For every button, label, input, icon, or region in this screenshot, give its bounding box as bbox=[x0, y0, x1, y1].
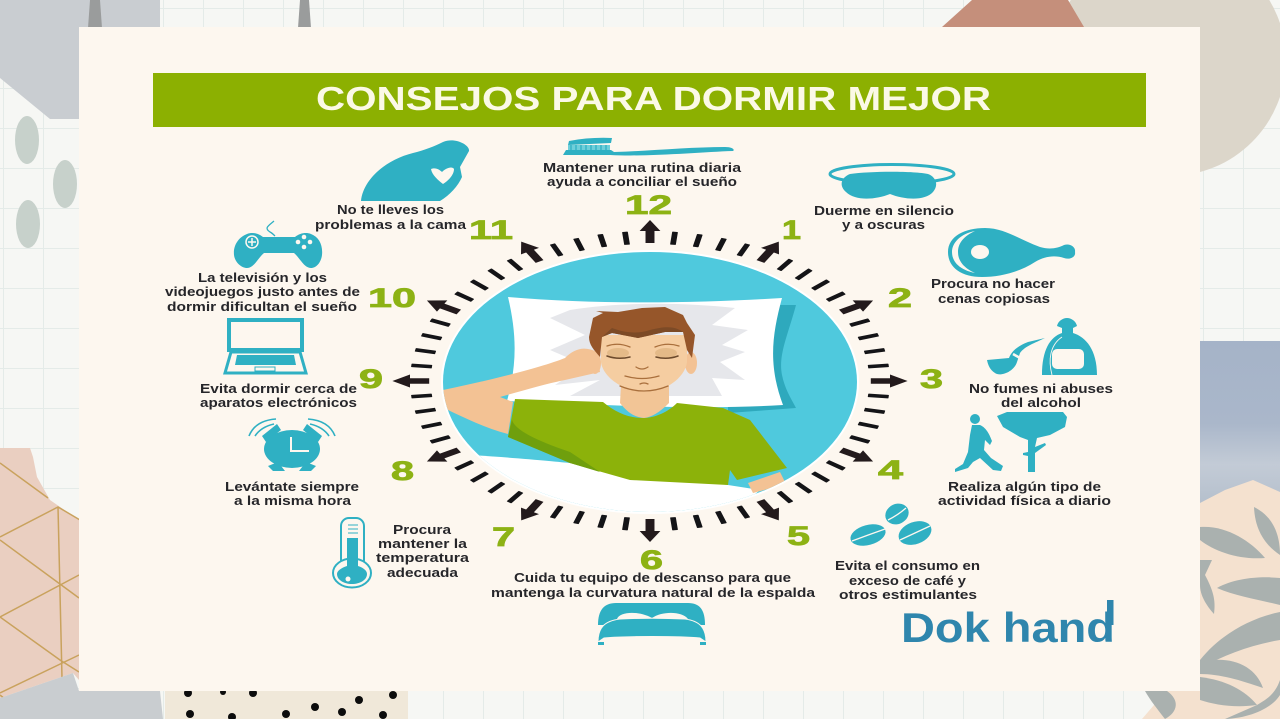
icon: sleep mask bbox=[830, 164, 954, 199]
clock numbers bbox=[359, 190, 943, 575]
clock numbers: 1 bbox=[782, 215, 801, 245]
shirt bbox=[508, 399, 787, 485]
logo: Dok hand: Dok hand bbox=[901, 604, 1115, 651]
clock numbers: 10 bbox=[368, 283, 416, 313]
tip 7: temperature: mantener la bbox=[378, 537, 468, 551]
right forearm bbox=[748, 472, 786, 493]
icon: pipe bbox=[987, 338, 1045, 374]
clock numbers: 9 bbox=[359, 364, 383, 394]
tip 2: light dinner: cenas copiosas bbox=[938, 292, 1050, 306]
clock dial ticks and arrows bbox=[392, 220, 908, 542]
tip 5: coffee: exceso de café y bbox=[849, 574, 966, 588]
tip 7: temperature: adecuada bbox=[387, 566, 459, 580]
icon: laptop bbox=[225, 320, 306, 373]
pillow bbox=[507, 297, 783, 407]
tip 10: television and games: dormir dificultan el sueño bbox=[167, 300, 357, 314]
tip 9: electronics: Evita dormir cerca de bbox=[200, 382, 357, 396]
tip 4: physical activity: Realiza algún tipo de bbox=[948, 480, 1101, 494]
icon: alarm clock bbox=[249, 419, 335, 471]
tip 12: routine bbox=[543, 138, 742, 189]
title banner bbox=[153, 73, 1146, 127]
neck bbox=[620, 385, 669, 418]
tip 8: wake time bbox=[225, 419, 359, 508]
icon: thermometer bbox=[333, 518, 371, 588]
clock numbers: 6 bbox=[640, 545, 663, 575]
title banner: CONSEJOS PARA DORMIR MEJOR bbox=[316, 80, 991, 117]
tip 7: temperature bbox=[333, 518, 470, 588]
icon: coffee beans bbox=[848, 500, 935, 549]
tip 3: no smoking or alcohol: No fumes ni abuses bbox=[969, 382, 1113, 396]
tip 5: coffee: otros estimulantes bbox=[839, 588, 977, 602]
central illustration: sleeping man bbox=[440, 250, 859, 515]
tip 10: television and games: videojuegos justo antes de bbox=[165, 285, 360, 299]
tip 6: bed: Cuida tu equipo de descanso para que bbox=[514, 571, 791, 585]
tip 11: problems bbox=[315, 140, 469, 232]
facial features bbox=[607, 344, 679, 391]
clock numbers: 3 bbox=[920, 364, 943, 394]
blanket bbox=[470, 455, 760, 515]
tip 10: television and games bbox=[165, 221, 360, 314]
tip 10: television and games: La televisión y los bbox=[198, 271, 327, 285]
tip 5: coffee bbox=[835, 500, 980, 602]
clock numbers: 4 bbox=[878, 455, 903, 485]
hair fringe shade bbox=[602, 327, 683, 338]
tip 7: temperature: Procura bbox=[393, 523, 452, 537]
icon: worried person bbox=[361, 140, 469, 201]
tip 3: no smoking or alcohol bbox=[969, 318, 1113, 410]
tip 2: light dinner bbox=[931, 228, 1075, 306]
clock numbers: 8 bbox=[391, 456, 414, 486]
icon: walker bbox=[955, 414, 1003, 472]
icon: bottle bbox=[1042, 318, 1097, 375]
tip 9: electronics: aparatos electrónicos bbox=[200, 396, 357, 410]
tip 11: problems: No te lleves los bbox=[337, 203, 444, 217]
icon: game controller bbox=[234, 221, 322, 268]
tip 4: physical activity bbox=[938, 412, 1111, 508]
tip 9: electronics bbox=[200, 320, 357, 410]
clock numbers: 11 bbox=[469, 215, 513, 245]
tip 12: routine: Mantener una rutina diaria bbox=[543, 161, 742, 175]
tip 12: routine: ayuda a conciliar el sueño bbox=[547, 175, 737, 189]
tip 1: silence and dark: Duerme en silencio bbox=[814, 204, 954, 218]
eyelids bbox=[607, 348, 629, 358]
tip 8: wake time: a la misma hora bbox=[234, 494, 352, 508]
pillow creases bbox=[550, 304, 748, 396]
ears bbox=[589, 352, 601, 374]
tip 8: wake time: Levántate siempre bbox=[225, 480, 359, 494]
clock numbers: 2 bbox=[888, 283, 912, 313]
tip 4: physical activity: actividad física a diario bbox=[938, 494, 1111, 508]
tip 7: temperature: temperatura bbox=[376, 551, 470, 565]
icon: tree bbox=[997, 412, 1067, 472]
clock numbers: 12 bbox=[625, 190, 672, 220]
tip 6: bed: mantenga la curvatura natural de la espalda bbox=[491, 586, 816, 600]
icon: toothbrush bbox=[563, 138, 734, 155]
tip 3: no smoking or alcohol: del alcohol bbox=[1001, 396, 1081, 410]
tip 11: problems: problemas a la cama bbox=[315, 218, 467, 232]
tip 2: light dinner: Procura no hacer bbox=[931, 277, 1055, 291]
shirt shadow bbox=[508, 420, 600, 472]
clock numbers: 5 bbox=[787, 521, 810, 551]
arm behind head bbox=[440, 349, 600, 434]
icon: bed bbox=[598, 603, 706, 645]
hair bbox=[589, 307, 695, 358]
tip 1: silence and dark: y a oscuras bbox=[842, 218, 925, 232]
tip 6: bed bbox=[491, 571, 816, 645]
face bbox=[601, 335, 687, 392]
clock numbers: 7 bbox=[492, 522, 515, 552]
tip 5: coffee: Evita el consumo en bbox=[835, 559, 980, 573]
pillow shadow bbox=[728, 305, 796, 413]
icon: ham bbox=[948, 228, 1075, 277]
tip 1: silence and dark bbox=[814, 164, 954, 232]
